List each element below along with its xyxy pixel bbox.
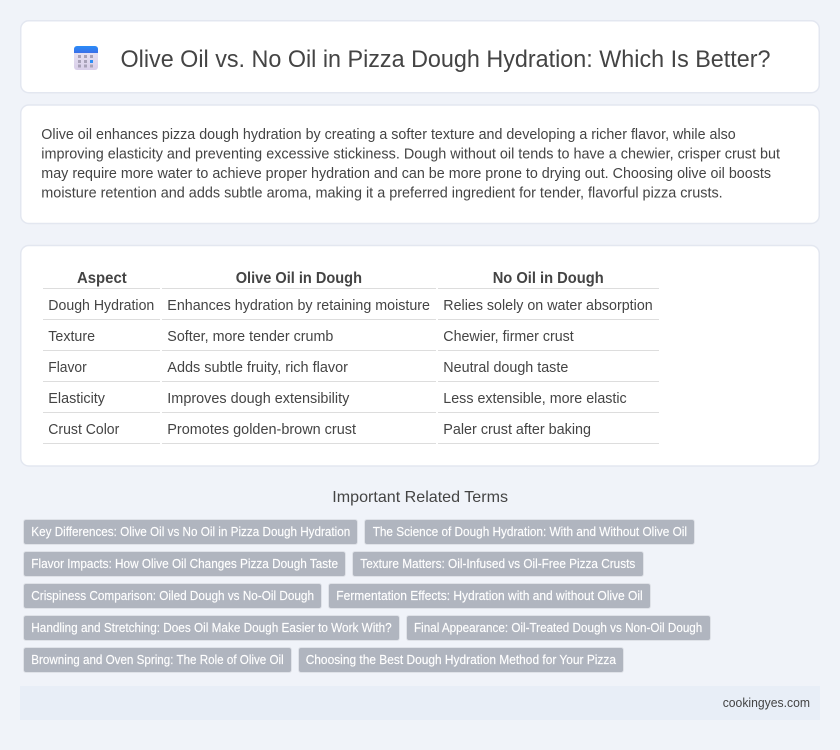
- tag: handling and stretching: [24, 616, 400, 640]
- tag: final appearance: Final Appearance: Oil-Treated Dough vs Non-Oil Dough: [414, 621, 702, 635]
- tag: key differences: Key Differences: Olive Oil vs No Oil in Pizza Dough Hydration: [31, 525, 350, 539]
- row: dough hydration: Dough Hydration: [48, 298, 154, 314]
- row: elasticity: Improves dough extensibility: [167, 391, 350, 407]
- intro text: Olive oil enhances pizza dough hydration by creating a softer texture and developing a richer flavor, while also: [41, 127, 736, 143]
- row: crust color: Paler crust after baking: [443, 422, 591, 438]
- tag: handling and stretching: Handling and Stretching: Does Oil Make Dough Easier to Work With?: [31, 621, 392, 635]
- tag: science of hydration: The Science of Dough Hydration: With and Without Olive Oil: [373, 525, 687, 539]
- title: Olive Oil vs. No Oil in Pizza Dough Hydration: Which Is Better?: [120, 46, 770, 73]
- tag: texture matters: Texture Matters: Oil-Infused vs Oil-Free Pizza Crusts: [360, 557, 635, 571]
- row: texture: [48, 329, 574, 345]
- row: crust color: [48, 422, 591, 438]
- row: flavor: [48, 360, 568, 376]
- tag: key differences: [24, 520, 358, 544]
- row: elasticity: Less extensible, more elastic: [443, 391, 627, 407]
- row: texture: Softer, more tender crumb: [167, 329, 333, 345]
- tag: fermentation effects: [328, 584, 650, 608]
- row: dough hydration: [48, 298, 653, 314]
- row: texture: Texture: [48, 329, 95, 345]
- row: dough hydration: Enhances hydration by retaining moisture: [167, 298, 430, 314]
- footer bar: [20, 686, 820, 720]
- tag: fermentation effects: Fermentation Effects: Hydration with and without Olive Oil: [336, 589, 643, 603]
- row: flavor: Adds subtle fruity, rich flavor: [167, 360, 348, 376]
- intro text: may require more water to achieve proper hydration and can be more prone to drying out. Choosing olive oil boosts: [41, 166, 771, 182]
- table header: [77, 270, 604, 287]
- panel: related term tags: [24, 520, 710, 672]
- row: flavor: Neutral dough taste: [443, 360, 568, 376]
- row: dough hydration: Relies solely on water absorption: [443, 298, 653, 314]
- intro text: [41, 127, 780, 201]
- tag: science of hydration: [364, 520, 694, 544]
- row: flavor: Flavor: [48, 360, 87, 376]
- tag: flavor impacts: [24, 552, 346, 576]
- tag: final appearance: [406, 616, 710, 640]
- tag: choosing the best method: Choosing the Best Dough Hydration Method for Your Pizza: [306, 653, 616, 667]
- panel: title card: [21, 21, 819, 93]
- table header: Olive Oil in Dough: [236, 270, 362, 287]
- row: elasticity: [48, 391, 627, 407]
- tag: browning and oven spring: [24, 648, 292, 672]
- tag: crispiness comparison: [24, 584, 322, 608]
- footer source: cookingyes.com: [723, 696, 810, 710]
- row: elasticity: Elasticity: [48, 391, 106, 407]
- tag: browning and oven spring: Browning and Oven Spring: The Role of Olive Oil: [31, 653, 284, 667]
- tag: texture matters: [352, 552, 644, 576]
- heading: important related terms: Important Related Terms: [332, 489, 508, 506]
- row: crust color: Promotes golden-brown crust: [167, 422, 356, 438]
- table header: Aspect: [77, 270, 127, 287]
- row: texture: Chewier, firmer crust: [443, 329, 574, 345]
- panel: intro paragraph card: [21, 105, 819, 224]
- panel: comparison table card: [21, 246, 819, 466]
- icon: calendar: [74, 46, 98, 70]
- tag: flavor impacts: Flavor Impacts: How Olive Oil Changes Pizza Dough Taste: [31, 557, 338, 571]
- tag: crispiness comparison: Crispiness Comparison: Oiled Dough vs No-Oil Dough: [31, 589, 314, 603]
- row: crust color: Crust Color: [48, 422, 119, 438]
- intro text: moisture retention and adds subtle aroma, making it a preferred ingredient for tender, flavorful pizza crusts.: [41, 185, 723, 201]
- table header: No Oil in Dough: [493, 270, 604, 287]
- tag: choosing the best method: [298, 648, 624, 672]
- intro text: improving elasticity and preventing excessive stickiness. Dough without oil tends to have a chewier, crisper crust but: [41, 146, 780, 162]
